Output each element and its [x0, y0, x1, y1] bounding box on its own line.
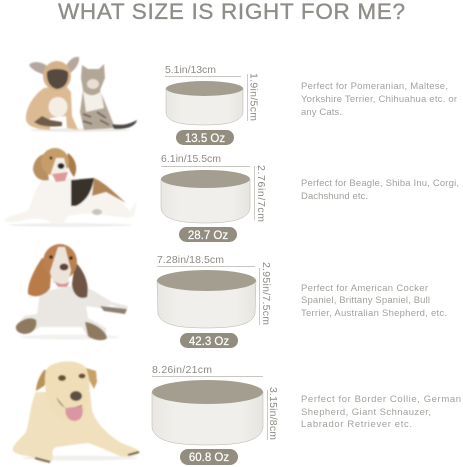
icon: french bulldog puppy and kitten: [26, 57, 137, 132]
text: large breeds: [301, 394, 461, 430]
icon: cocker spaniel: [16, 244, 128, 340]
bowl: [161, 170, 250, 223]
text: large breeds: Labrador Retriever etc.: [301, 419, 412, 430]
text: medium-small breeds: Perfect for Beagle, Shiba Inu, Corgi,: [301, 178, 459, 189]
width dimension: 5.1in/13cm: [165, 64, 216, 76]
height dimension: 3.15in/8cm: [267, 387, 279, 440]
bowl group: 13.5 Oz: [165, 64, 260, 145]
text: medium breeds: Perfect for American Cocker: [301, 283, 428, 294]
height dimension: 1.9in/5cm: [248, 73, 260, 121]
text: large breeds: Perfect for Border Collie, German: [301, 394, 461, 405]
text: large breeds: Shepherd, Giant Schnauzer,: [301, 407, 431, 418]
text: small breeds: Perfect for Pomeranian, Maltese,: [301, 81, 448, 92]
text: medium-small breeds: [301, 178, 459, 202]
bowl group: 42.3 Oz: [157, 254, 272, 348]
text: medium breeds: [301, 283, 447, 319]
width dimension: 8.26in/21cm: [152, 364, 212, 376]
bowl group: 60.8 Oz: [152, 364, 279, 465]
capacity pill: 28.7 Oz: [188, 230, 228, 242]
height dimension: 2.95in/7.5cm: [260, 262, 272, 325]
icon: beagle: [4, 148, 137, 227]
bowl group: 28.7 Oz: [161, 153, 267, 242]
text: small breeds: Yorkshire Terrier, Chihuahua etc. or: [301, 94, 457, 105]
bowl: [157, 270, 256, 328]
text: medium-small breeds: Dachshund etc.: [301, 191, 368, 202]
icon: labrador: [13, 361, 140, 463]
width dimension: 7.28in/18.5cm: [157, 254, 224, 266]
text: small breeds: [301, 81, 457, 118]
capacity pill: 13.5 Oz: [185, 133, 225, 145]
capacity pill: 42.3 Oz: [189, 336, 229, 348]
capacity pill: 60.8 Oz: [189, 452, 229, 464]
width dimension: 6.1in/15.5cm: [161, 153, 221, 165]
text: medium breeds: Spaniel, Brittany Spaniel, Bull: [301, 295, 430, 306]
text: small breeds: any Cats.: [301, 107, 342, 118]
height dimension: 2.76in/7cm: [255, 165, 267, 222]
text: medium breeds: Terrier, Australian Shepherd, etc.: [301, 308, 447, 319]
bowl: [166, 81, 243, 125]
bowl: [152, 380, 263, 445]
